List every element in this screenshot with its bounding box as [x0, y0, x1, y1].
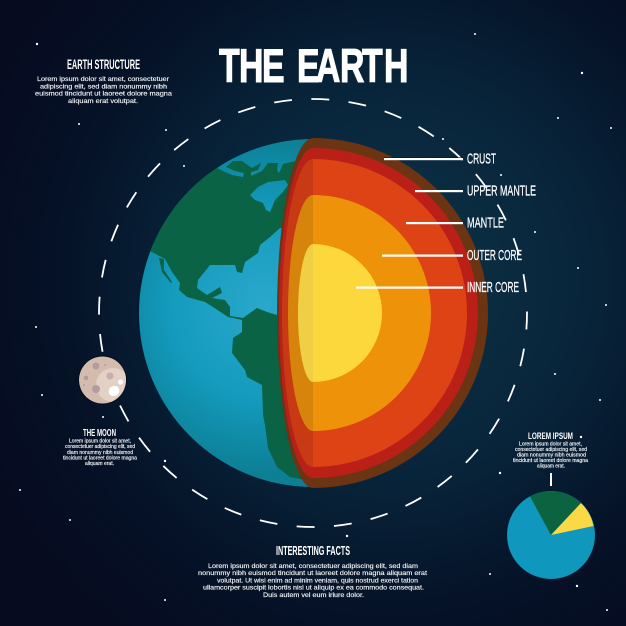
- paragraph: interesting facts: [198, 563, 427, 599]
- label: upper mantle: [415, 184, 536, 200]
- layer: crust: [277, 138, 488, 488]
- heading: lorem ipsum: LOREM IPSUM: [528, 431, 573, 442]
- heading: the moon: THE MOON: [83, 428, 116, 439]
- paragraph: interesting facts: nonummy nibh euismod tincidunt ut laoreet dolore magna aliquam erat: [198, 570, 427, 577]
- pie slice: blue: [507, 491, 595, 579]
- paragraph: lorem ipsum: [513, 442, 588, 470]
- earth structure text block: [35, 57, 173, 105]
- paragraph: lorem ipsum: consectetuer adipiscing elit, sed: [515, 447, 587, 453]
- paragraph: the moon: aliquam erat.: [85, 461, 114, 467]
- paragraph: earth structure: Lorem ipsum dolor sit amet, consectetuer: [37, 76, 169, 83]
- continents: [150, 161, 302, 480]
- label: outer core: OUTER CORE: [467, 248, 522, 264]
- label: mantle: [406, 216, 504, 232]
- paragraph: earth structure: euismod tincidunt ut laoreet dolore magna: [35, 90, 173, 98]
- label: inner core: INNER CORE: [467, 280, 519, 296]
- layer: upper mantle: [279, 148, 478, 478]
- layer: mantle: [282, 159, 467, 467]
- paragraph: lorem ipsum: tincidunt ut laoreet dolore magna: [513, 458, 588, 464]
- lorem ipsum text block: [513, 431, 588, 470]
- pie chart: [507, 491, 595, 579]
- label: upper mantle: UPPER MANTLE: [467, 184, 536, 200]
- dashed moon orbit: [64, 64, 562, 562]
- paragraph: the moon: tincidunt ut laoreet dolore magna: [63, 456, 137, 462]
- interesting facts text block: [198, 544, 427, 599]
- paragraph: the moon: consectetuer adipiscing elit, sed: [65, 444, 135, 450]
- paragraph: interesting facts: ullamcorper suscipit lobortis nisl ut aliquip ex ea commodo consequat.: [203, 584, 424, 592]
- paragraph: earth structure: adipiscing elit, sed diam nonummy nibh: [40, 84, 168, 90]
- pie slice: green: [530, 491, 581, 535]
- paragraph: lorem ipsum: diam nonummy nibh euismod: [517, 452, 586, 458]
- paragraph: the moon: Lorem ipsum dolor sit amet,: [69, 438, 131, 444]
- earth cross-section: [277, 138, 488, 488]
- paragraph: lorem ipsum: aliquam erat.: [537, 464, 565, 470]
- earth globe: [139, 139, 309, 487]
- pie chart connector: [550, 473, 552, 486]
- label: mantle: MANTLE: [467, 216, 504, 232]
- paragraph: interesting facts: volutpat. Ut wisi enim ad minim veniam, quis nostrud exerci tation: [217, 578, 419, 584]
- heading: interesting facts: INTERESTING FACTS: [276, 544, 350, 558]
- paragraph: lorem ipsum: Lorem ipsum dolor sit amet,: [519, 442, 582, 448]
- paragraph: earth structure: [35, 76, 173, 105]
- ocean: [139, 139, 487, 487]
- title: THE EARTH: [219, 40, 408, 92]
- paragraph: the moon: [63, 438, 137, 467]
- icon: moon: [78, 356, 130, 404]
- paragraph: interesting facts: Duis autem vel eum iriure dolor.: [263, 592, 364, 599]
- heading: earth structure: EARTH STRUCTURE: [67, 57, 140, 72]
- pie slice: yellow: [551, 503, 594, 535]
- label: crust: [384, 152, 496, 168]
- layer: inner core: [298, 244, 382, 382]
- moon text block: [63, 428, 137, 467]
- label: crust: CRUST: [467, 152, 496, 168]
- layer leader lines and labels: [356, 152, 536, 296]
- layer: outer core: [288, 195, 431, 431]
- paragraph: earth structure: aliquam erat volutpat.: [68, 98, 138, 105]
- paragraph: the moon: diam nonummy nibh euismod: [67, 450, 133, 456]
- paragraph: interesting facts: Lorem ipsum dolor sit amet, consectetuer adipiscing elit, sed diam: [208, 563, 418, 570]
